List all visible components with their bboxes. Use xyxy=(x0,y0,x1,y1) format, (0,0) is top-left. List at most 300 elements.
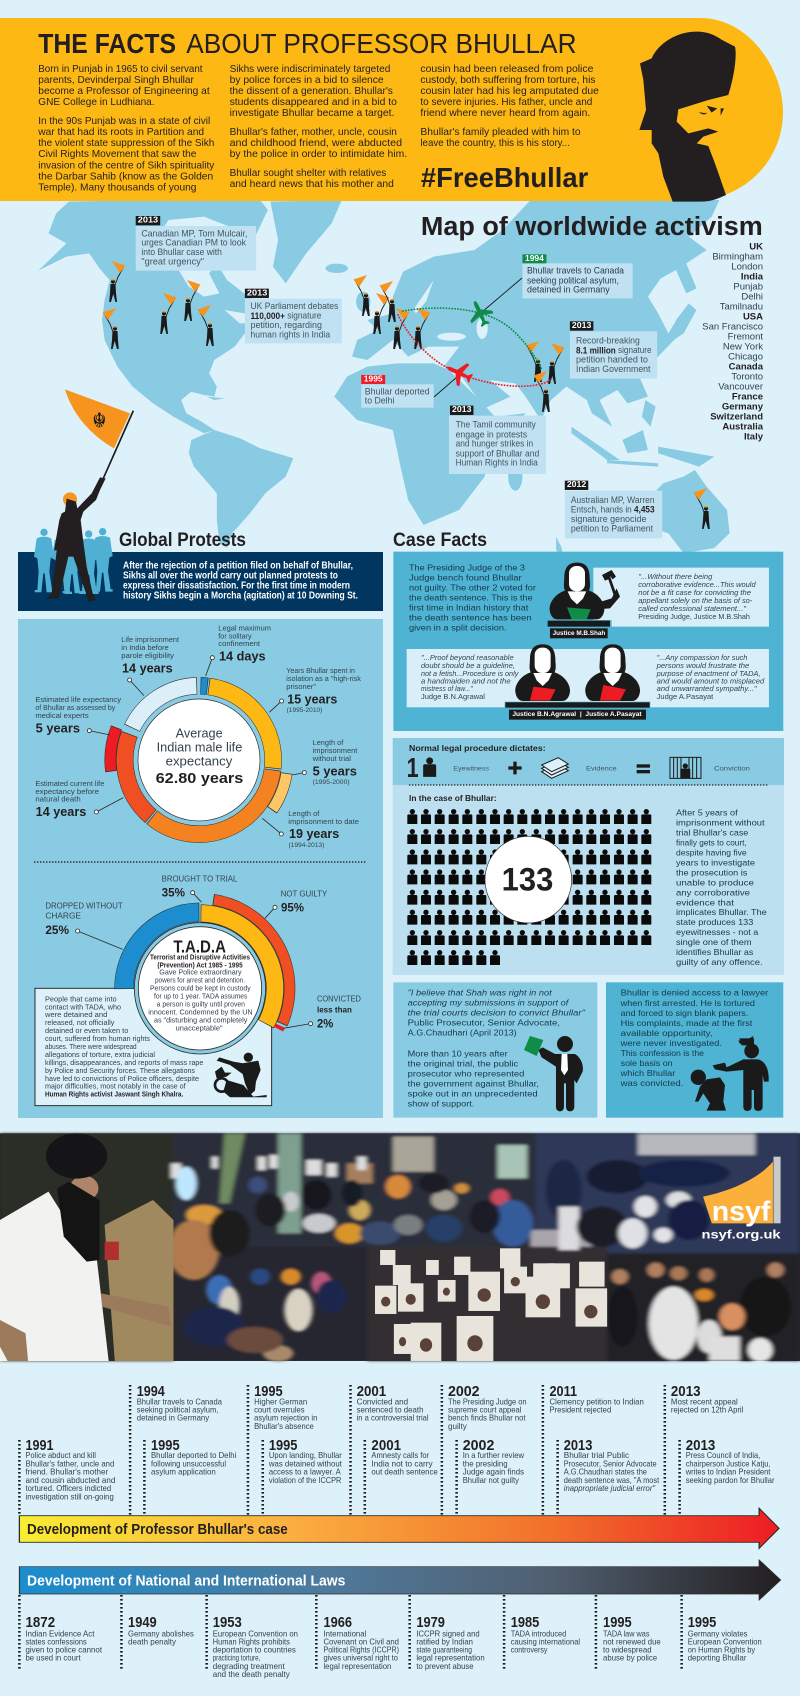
TADA description box xyxy=(35,988,272,1106)
1979 law: ratified by Indian xyxy=(416,1637,473,1647)
2001 event: sentenced xyxy=(357,1384,429,1423)
1966 law: Covenant on Civil and xyxy=(323,1637,399,1647)
callout: 1995: 1995 xyxy=(364,375,383,384)
map: islands xyxy=(184,264,714,560)
1949 law: death penalty xyxy=(128,1637,176,1647)
list of activism locations: UK xyxy=(749,242,763,252)
timeline: national and international laws xyxy=(19,1560,781,1679)
label: 19 years to date: 19 years xyxy=(289,827,339,841)
quotes: lower judges box: not a fetish...Procedure is only xyxy=(421,671,519,678)
2002 event: appeal: supreme court appeal xyxy=(448,1406,521,1415)
leader lines xyxy=(87,656,306,836)
2002 event: appeal: 2002 xyxy=(448,1384,480,1400)
donut chart xyxy=(35,625,361,865)
label: brought to trial xyxy=(162,874,238,899)
2013 event: appeal rejected: 2013 xyxy=(671,1384,701,1400)
quotes: lower judges box: and would amount to misplaced xyxy=(657,678,766,685)
label: 14 days xyxy=(218,625,271,664)
quotes: lower judges box: purpose of enactment of TADA, xyxy=(656,671,761,678)
2001 event: sentenced: sentenced to death xyxy=(357,1406,423,1415)
133 circle xyxy=(485,836,572,923)
callout: Tamil community: engage in protests xyxy=(456,430,527,440)
1949 law: Germany abolishes xyxy=(128,1629,194,1639)
label: convicted xyxy=(317,994,361,1031)
callout: Canadian MP: into Bhullar case with xyxy=(141,247,222,257)
protester figure xyxy=(45,477,106,602)
prosecutor quote: "I believe that Shah was right in not xyxy=(408,988,552,998)
normal legal procedure row: Conviction xyxy=(714,765,750,772)
eyewitness explanation: finally gets to court, xyxy=(676,837,747,847)
intro column 3: custody, both suffering from torture, his xyxy=(420,74,595,85)
global protests banner: history Sikhs begin a Morcha (agitation) at 10 Downing St. xyxy=(123,590,358,602)
1994 event xyxy=(137,1384,222,1423)
2011 event: President rejected xyxy=(549,1406,611,1415)
1995 law: Germany violates: deporting Bhullar xyxy=(688,1654,747,1663)
TADA description box: contact with TADA, who xyxy=(45,1004,121,1011)
arrow: case development: Development of Professor Bhullar's case xyxy=(27,1521,288,1538)
1966 law: 1966 xyxy=(323,1615,352,1631)
label: 14 days: confinement xyxy=(218,641,260,648)
hashtag: #FreeBhullar xyxy=(421,161,588,193)
callout: UK Parliament: 110,000+ signature xyxy=(251,311,321,321)
list of activism locations: Vancouver xyxy=(718,382,763,392)
eyewitness explanation: trial Bhullar's case xyxy=(676,827,749,837)
list of activism locations: Punjab xyxy=(733,282,763,292)
normal legal procedure row: Evidence xyxy=(586,765,617,772)
arrow: laws development xyxy=(19,1560,781,1600)
2002 event: appeal: guilty xyxy=(448,1422,467,1431)
turban xyxy=(63,492,77,506)
1995 event: landing: 1995 xyxy=(269,1438,298,1454)
label: 14 years life imprisonment: Life imprisonment xyxy=(121,637,179,644)
panel: public prosecutor xyxy=(393,982,783,1118)
icon: Justice Shah xyxy=(548,563,620,638)
label: 14 years current: natural death xyxy=(35,796,81,803)
1991 event: Bhullar's father, uncle and xyxy=(26,1460,114,1469)
TADA description box: by Police and Security forces. These allegations xyxy=(45,1068,195,1075)
intro column 1: GNE College in Ludhiana. xyxy=(38,96,155,107)
normal legal procedure row xyxy=(407,743,750,783)
label: 14 years life imprisonment: parole eligibility xyxy=(121,653,175,660)
eyewitness explanation: After 5 years of xyxy=(676,807,738,817)
map: Eurasia xyxy=(352,200,719,427)
intro column 2: by the police in order to intimidate him. xyxy=(230,148,407,159)
2001 event: Amnesty: Amnesty calls for xyxy=(371,1451,429,1460)
map: Greenland xyxy=(270,200,342,283)
2001 event: Amnesty: out death sentence xyxy=(371,1468,438,1477)
callout: Canadian MP xyxy=(136,216,256,271)
intro column 2: investigate Bhullar became a target. xyxy=(230,107,394,118)
TADA description box: allegations of torture, extra judicial xyxy=(45,1052,155,1059)
intro column 1: war that had its roots in Partition and xyxy=(37,126,204,137)
intro column 2: students disappeared and in a bid to xyxy=(230,96,397,107)
label: 5 years without trial xyxy=(312,740,357,786)
callout: 1994: Bhullar travels to Canada xyxy=(527,266,624,276)
1966 law: legal representation xyxy=(323,1662,391,1671)
2002 event: review: Judge again finds xyxy=(463,1468,524,1477)
1995 law: TADA lapsed xyxy=(603,1615,661,1663)
label: brought to trial: BROUGHT TO TRIAL xyxy=(162,874,238,884)
2002 event: appeal: bench finds Bhullar not xyxy=(448,1414,526,1423)
2013 event: prosecutor: 2013 xyxy=(564,1438,592,1454)
TADA text: innocent. Condemned by the UN xyxy=(148,1009,253,1016)
1995 law: Germany violates: Germany violates xyxy=(688,1629,748,1639)
quotes: lower judges box: and unwarranted sympathy..." xyxy=(657,686,757,693)
pictogram: 133 eyewitnesses xyxy=(407,809,651,965)
1953 law xyxy=(213,1615,298,1679)
1985 law: controversy xyxy=(511,1646,548,1655)
label: 15 years isolation: (1995-2010) xyxy=(287,707,322,714)
TADA text: a person is guilty until proven xyxy=(157,1001,245,1008)
icon: red plane xyxy=(442,357,476,390)
eyewitness explanation: years to investigate xyxy=(676,857,755,867)
donut chart: expectancy xyxy=(166,754,233,768)
intro column 3: to severe injuries. His father, uncle and xyxy=(420,96,592,107)
man in white and guard xyxy=(0,1133,173,1361)
quotes: lower judges box: "...Proof beyond reasonable xyxy=(421,655,514,662)
label: convicted: less than xyxy=(317,1005,352,1015)
label: not guilty xyxy=(281,889,328,915)
judge verdict text: the death sentence. This is the xyxy=(409,593,533,603)
prosecutor quote xyxy=(408,988,586,1109)
label: not guilty: NOT GUILTY xyxy=(281,889,328,899)
2002 event: review: 2002 xyxy=(463,1438,494,1454)
TADA description box: major difficulties, most notably in the case of xyxy=(45,1083,186,1090)
donut chart: Average xyxy=(176,726,223,740)
TADA description box: abuses. There were widespread xyxy=(45,1044,137,1051)
label: 15 years isolation: Years Bhullar spent in xyxy=(286,668,355,675)
panel: legal procedure xyxy=(393,738,784,975)
1995 law: TADA lapsed: TADA law was xyxy=(603,1629,650,1639)
intro column 3: Bhullar's family pleaded with him to xyxy=(420,126,581,137)
intro column 1: become a Professor of Engineering at xyxy=(38,85,210,96)
quote: Justice Shah: called confessional statement..." xyxy=(638,606,747,613)
label: 14 years life imprisonment: in India before xyxy=(121,645,169,652)
heading: Case Facts: Case Facts xyxy=(393,529,487,551)
2002 event: appeal: The Presiding Judge on xyxy=(448,1398,527,1407)
illustration: protester with Sikh flag: ☬ xyxy=(92,409,107,433)
intro column 1: the violent state suppression of the Sikh xyxy=(38,137,214,148)
map: South America xyxy=(189,430,293,548)
quotes: lower judges box: persons would frustrate the xyxy=(656,663,749,670)
1991 event: friend. Bhullar's mother xyxy=(26,1468,108,1477)
1985 law: 1985 xyxy=(511,1615,540,1631)
TADA description box: released, not officially xyxy=(45,1020,115,1027)
1995 event: landing xyxy=(268,1438,342,1485)
lawyer access text: Bhullar is denied access to a lawyer xyxy=(621,988,769,998)
TADA center xyxy=(134,923,266,1054)
illustration: protester with Sikh flag xyxy=(34,389,133,602)
list of activism locations: India xyxy=(741,272,764,282)
judge verdict text: The Presiding Judge of the 3 xyxy=(409,563,525,573)
flag protesters on map xyxy=(102,261,710,529)
callout: record petition: Record-breaking xyxy=(576,336,640,346)
intro column 2: the dissent of a generation. Bhullar's xyxy=(230,85,393,96)
icon: police beating xyxy=(215,1053,267,1097)
world map xyxy=(38,200,730,560)
1995 event: German court: 1995 xyxy=(254,1384,283,1400)
map: North America xyxy=(38,200,268,433)
intro column 1: invasion of the centre of Sikh spirituality xyxy=(38,159,215,171)
eyewitness explanation: despite having five xyxy=(676,847,747,857)
eyewitness explanation: evidence that xyxy=(676,897,735,907)
1985 law: causing international xyxy=(511,1637,580,1647)
callout: Tamil community: The Tamil community xyxy=(456,420,536,430)
TADA arcs xyxy=(82,870,318,1106)
lawyer access text: was convicted. xyxy=(619,1078,683,1088)
callout: Tamil community: support of Bhullar and xyxy=(456,449,539,459)
callout: record petition: petition handed to xyxy=(576,355,648,365)
callout: Tamil community: 2013 xyxy=(452,406,472,415)
panel: life expectancy and TADA xyxy=(18,619,383,1118)
label: 14 years current xyxy=(35,781,104,819)
lawyer access text: and forced to sign blank papers. xyxy=(621,1008,748,1018)
prosecutor quote: the government against Bhullar, xyxy=(408,1079,539,1089)
quotes: lower judges box xyxy=(407,649,769,707)
label: 14 days: for solitary xyxy=(218,633,252,640)
2011 event: Clemency petition to Indian xyxy=(549,1398,644,1407)
intro column 2: by police forces in a bid to silence xyxy=(230,74,384,85)
quote: Justice Shah: appellant solely on the basis of so- xyxy=(638,598,753,605)
label: 5 years estimated: of Bhullar as assessed by xyxy=(35,705,116,712)
1995 law: Germany violates xyxy=(688,1615,762,1663)
1872 law: given to police cannot xyxy=(26,1646,103,1655)
normal legal procedure row: 1 xyxy=(407,752,419,783)
list of activism locations: Toronto xyxy=(731,372,763,382)
map: seas xyxy=(413,280,488,341)
banner background xyxy=(0,18,783,201)
2013 event: appeal rejected: rejected on 12th April xyxy=(671,1406,743,1415)
1995 law: Germany violates: 1995 xyxy=(688,1615,717,1631)
1985 law xyxy=(511,1615,580,1655)
1995 event: German court: court overrules xyxy=(254,1406,305,1415)
icon: officer and kneeling prisoner xyxy=(691,1036,769,1111)
lawyer access text: This confession is the xyxy=(621,1048,704,1058)
intro column 3: cousin had been released from police xyxy=(420,63,593,74)
callout: 1995 xyxy=(361,375,434,408)
2001 event: sentenced: 2001 xyxy=(357,1384,387,1400)
133 circle: 133 xyxy=(502,862,553,898)
1949 law: 1949 xyxy=(128,1615,157,1631)
quotes: lower judges box: Judge A.Pasayat xyxy=(657,694,713,701)
label: 14 years current: 14 years xyxy=(36,805,86,819)
donut segments xyxy=(94,655,304,865)
in the case of Bhullar: In the case of Bhullar: xyxy=(409,793,497,803)
eyewitness explanation: eyewitnesses - not a xyxy=(676,927,759,937)
eyewitness explanation: any corroborative xyxy=(676,887,750,897)
map: Australia xyxy=(645,470,730,553)
prosecutor quote: show of support. xyxy=(408,1099,474,1109)
1985 law: TADA introduced xyxy=(511,1629,566,1639)
callout: Australian MP: Entsch, hands in 4,453 xyxy=(571,505,655,515)
intro column 1: Civil Rights Movement that saw the xyxy=(38,148,196,159)
list of activism locations: France xyxy=(732,392,763,402)
list of activism locations: Canada xyxy=(729,362,764,372)
prosecutor quote: the trial courts decision to convict Bhullar" xyxy=(408,1008,586,1018)
normal legal procedure row: Normal legal procedure dictates: xyxy=(409,743,546,753)
2002 event: review: Bhullar not guilty xyxy=(463,1476,519,1485)
label: dropped without charge xyxy=(45,901,123,937)
list of activism locations: Birmingham xyxy=(712,252,763,262)
2013 event: Press Council xyxy=(685,1438,775,1485)
1966 law: International xyxy=(323,1629,366,1639)
intro column 2: Bhullar sought shelter with relatives xyxy=(230,167,386,178)
list of activism locations: Italy xyxy=(744,432,764,442)
global protests banner: express their dissatisfaction. For the first time in modern xyxy=(123,580,350,592)
1979 law: to prevent abuse xyxy=(416,1662,473,1671)
flight paths xyxy=(398,308,551,386)
judge verdict text: the death sentence has been xyxy=(409,613,532,623)
label: 19 years to date: imprisonment to date xyxy=(288,819,359,826)
poster faces xyxy=(381,1277,597,1352)
eyewitness explanation: guilty of any offence. xyxy=(676,957,763,967)
callout: Canadian MP: urges Canadian PM to look xyxy=(141,238,246,248)
prosecutor quote: Public Prosecutor, Senior Advocate, xyxy=(408,1018,560,1028)
callout: 1994 xyxy=(522,254,633,298)
1995 event: German court: Higher German xyxy=(254,1398,307,1407)
callout: Australian MP: signature genocide xyxy=(571,514,646,524)
2013 event: appeal rejected: Most recent appeal xyxy=(671,1398,738,1407)
TADA description box: have led to convictions of Police officers, despite xyxy=(45,1076,199,1083)
1953 law: Human Rights prohibits xyxy=(213,1637,290,1647)
1995 event: landing: violation of the ICCPR xyxy=(269,1476,341,1485)
label: dropped without charge: CHARGE xyxy=(45,911,81,921)
1991 event xyxy=(26,1438,115,1502)
TADA text: T.A.D.A xyxy=(173,937,226,957)
donut center xyxy=(138,699,260,821)
normal legal procedure row: Eyewitness xyxy=(453,765,490,772)
callout: UK Parliament: human rights in India xyxy=(251,330,330,340)
2013 event: prosecutor: Bhullar trial Public xyxy=(564,1451,629,1460)
1994 event: detained in Germany xyxy=(137,1414,209,1423)
nsyf logo: nsyf.org.uk xyxy=(702,1228,781,1242)
quotes: lower judges box: doubt should be a guideline, xyxy=(421,663,515,670)
global protests banner: Sikhs all over the world carry out planned protests to xyxy=(123,570,338,582)
callout: Canadian MP: 2013 xyxy=(138,216,158,225)
list of activism locations: Chicago xyxy=(728,352,763,362)
TADA description box: detained or even taken to xyxy=(45,1028,128,1035)
label: 15 years isolation: isolation as a "high-risk xyxy=(286,676,361,683)
2002 event: appeal xyxy=(448,1384,527,1431)
quote: Justice Shah: "...Without there being xyxy=(638,574,712,581)
intro column 1: parents, Devinderpal Singh Bhullar xyxy=(38,74,194,85)
label: 14 years life imprisonment: 14 years xyxy=(122,661,173,675)
2002 event: review: the presiding xyxy=(463,1460,508,1469)
list of activism locations: London xyxy=(731,262,763,272)
1995 event: deported xyxy=(151,1438,236,1477)
list of activism locations: Switzerland xyxy=(710,412,763,422)
prosecutor quote: prosecutor who represented xyxy=(408,1069,525,1079)
callout: Tamil community: and hunger strikes in xyxy=(456,439,533,449)
intro column 3 xyxy=(420,63,599,148)
2013 event: Press Council: 2013 xyxy=(686,1438,715,1454)
intro column 3: friend where never heard from again. xyxy=(420,107,590,118)
callout: 1994: seeking political asylum, xyxy=(527,276,619,286)
eyewitness explanation: implicates Bhullar. The xyxy=(676,907,767,917)
eyewitness explanation: state produces 133 xyxy=(676,917,754,927)
blurred photo colour masses xyxy=(0,1133,800,1362)
1991 event: 1991 xyxy=(26,1438,54,1454)
1872 law: 1872 xyxy=(26,1615,55,1631)
label: 15 years isolation: prisoner" xyxy=(286,684,317,691)
title: THE FACTS xyxy=(38,27,176,59)
TADA text: Terrorist and Disruptive Activities xyxy=(150,954,250,961)
1872 law: be used in court xyxy=(26,1654,81,1663)
2001 event: Amnesty: 2001 xyxy=(371,1438,401,1454)
map: Africa xyxy=(334,363,526,525)
2001 event: sentenced: in a controversial trial xyxy=(357,1414,429,1423)
label: dropped without charge: DROPPED WITHOUT xyxy=(45,901,123,911)
label: 14 days: 14 days xyxy=(219,650,266,664)
eyewitness explanation: single one of them xyxy=(676,937,752,947)
label: 5 years estimated xyxy=(35,697,122,736)
1991 event: Police abduct and kill xyxy=(26,1451,96,1460)
lawyer access text: when first arrested. He is tortured xyxy=(620,998,755,1008)
1991 event: and cousin abducted and xyxy=(26,1476,115,1485)
1995 law: TADA lapsed: to widespread xyxy=(603,1646,652,1655)
lawyer access text: His complaints, made at the first xyxy=(621,1018,753,1028)
1995 event: German court xyxy=(254,1384,317,1431)
callout: Canadian MP: Canadian MP, Tom Mulcair, xyxy=(141,229,247,239)
intro column 2 xyxy=(230,63,407,189)
TADA text: powers for arrest and detention. xyxy=(155,977,245,984)
protest posters xyxy=(375,1248,607,1361)
TADA text: unacceptable" xyxy=(176,1025,223,1032)
1994 event: seeking political asylum, xyxy=(137,1406,218,1415)
TADA text: for up to 1 year. TADA assumes xyxy=(154,993,248,1000)
1991 event: tortured. Officers indicted xyxy=(26,1484,111,1493)
label: 14 years current: expectancy before xyxy=(35,789,99,796)
TADA description box: Human Rights activist Jaswant Singh Khalra. xyxy=(45,1091,183,1098)
label: 15 years isolation: 15 years xyxy=(287,692,337,706)
1953 law: 1953 xyxy=(213,1615,242,1631)
list of activism locations: New York xyxy=(723,342,763,352)
intro column 3: cousin later had his leg amputated due xyxy=(420,85,599,96)
1995 event: deported: asylum application xyxy=(151,1468,216,1477)
1995 law: TADA lapsed: not renewed due xyxy=(603,1637,661,1647)
icon: Justices Agrawal and Pasayat xyxy=(505,644,650,720)
TADA description box: were detained and xyxy=(44,1012,107,1019)
intro column 2: Sikhs were indiscriminately targeted xyxy=(230,63,390,74)
label: 5 years estimated: 5 years xyxy=(36,722,80,736)
1979 law: 1979 xyxy=(416,1615,445,1631)
callout: Australian MP: Australian MP, Warren xyxy=(571,495,655,505)
prosecutor quote: More than 10 years after xyxy=(408,1048,508,1058)
photo montage of protests xyxy=(0,1133,800,1362)
1966 law: Political Rights (ICCPR) xyxy=(323,1646,399,1655)
intro column 1: Temple). Many thousands of young xyxy=(38,181,196,193)
prosecutor quote: accepting my submissions in support of xyxy=(408,998,570,1008)
intro column 1: In the 90s Punjab was in a state of civil xyxy=(38,115,210,126)
dotted timeline markers xyxy=(19,1595,682,1669)
label: 19 years to date xyxy=(288,811,359,849)
2013 event: prosecutor: Prosecutor, Senior Advocate xyxy=(564,1460,657,1469)
TADA text xyxy=(148,937,253,1032)
1953 law: degrading treatment xyxy=(213,1662,285,1671)
1995 event: deported: 1995 xyxy=(151,1438,180,1454)
callout: Australian MP: petition to Parliament xyxy=(571,524,654,534)
TADA chart xyxy=(35,870,361,1106)
prosecutor quote: spoke out in an unprecedented xyxy=(408,1089,538,1099)
callout: Australian MP xyxy=(565,481,662,538)
intro column 1: Born in Punjab in 1965 to civil servant xyxy=(38,63,203,74)
intro column 2: Bhullar's father, mother, uncle, cousin xyxy=(230,126,397,137)
heading: Global Protests: Global Protests xyxy=(119,529,246,551)
TADA description box: People that came into xyxy=(45,996,117,1003)
label: brought to trial: 35% xyxy=(162,885,185,899)
prosecutor quote: the original trial, the public xyxy=(408,1059,518,1069)
callout: 1994: detained in Germany xyxy=(527,285,610,295)
